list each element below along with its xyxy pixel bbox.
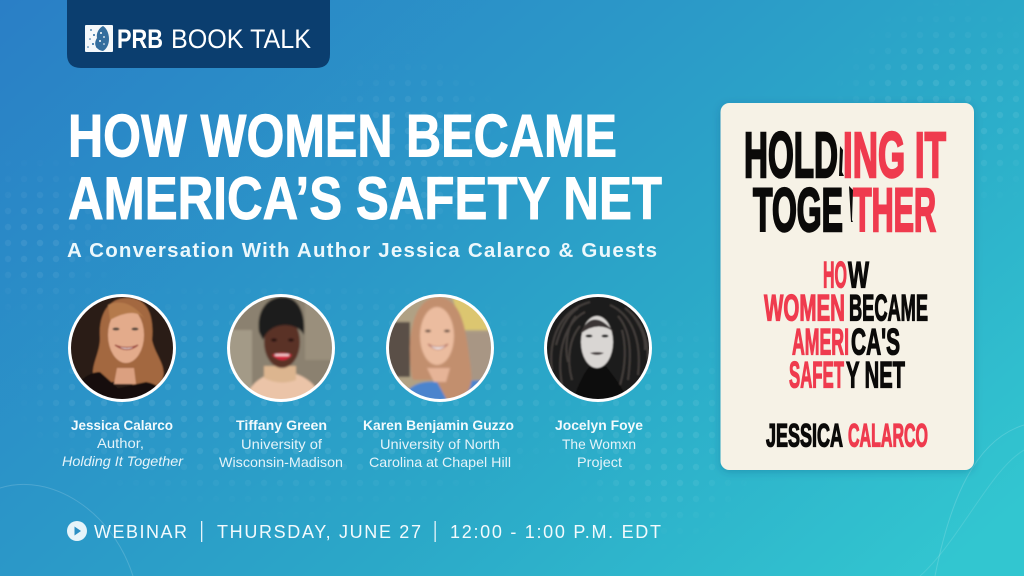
book title: TOGE [753,176,843,244]
photo: Karen Benjamin Guzzo [386,294,494,402]
heading: book talk: BOOK TALK [171,24,311,54]
speaker: Karen Benjamin Guzzo [363,294,514,470]
affiliation [562,436,636,470]
book cover: Holding It Together [720,103,974,470]
role: Author, [97,435,144,451]
affiliation: The Womxn [562,436,636,452]
book subtitle: SAFET [789,354,844,396]
icon: play button [67,521,87,541]
title [68,102,662,232]
book subtitle [764,254,928,396]
speaker: Tiffany Green [219,294,343,470]
book author: JESSICA [766,418,843,454]
book title: HOLD [744,119,838,191]
header tab: PRB Book Talk [67,0,330,68]
photo: Jessica Calarco [68,294,176,402]
book title: THER [853,176,936,244]
affiliation [219,436,343,470]
book cover: Holding It Together: BECAME [849,288,928,328]
name: Tiffany Green [236,417,327,433]
book subtitle: CA'S [851,322,900,362]
affiliation: Project [577,454,622,470]
affiliation: University of [241,436,322,452]
book title: Holding It Together [62,453,184,469]
icon: PRB logo [85,25,113,52]
affiliation: Carolina at Chapel Hill [369,454,511,470]
book subtitle: WOMEN [764,288,845,328]
book subtitle: AMERI [792,322,849,362]
book author: CALARCO [848,418,928,454]
name: Karen Benjamin Guzzo [363,417,514,433]
name: Jessica Calarco [71,417,173,433]
logo wordmark: PRB [117,24,163,54]
subtitle: A Conversation With Author Jessica Calarco & Guests [67,239,657,262]
speaker: Jessica Calarco [62,294,184,469]
event details bar [67,521,661,542]
book subtitle: HO [823,254,847,296]
name: Jocelyn Foye [555,417,643,433]
webinar label: WEBINAR [94,522,187,542]
affiliation [369,436,511,470]
book subtitle: Y NET [846,354,905,396]
book title [744,119,946,244]
title: HOW WOMEN BECAME [68,102,617,170]
time: 12:00 - 1:00 P.M. EDT [450,522,661,542]
book subtitle: W [848,254,869,296]
photo: Tiffany Green [227,294,335,402]
speaker: Jocelyn Foye [544,294,652,470]
date: THURSDAY, JUNE 27 [217,522,421,542]
title: AMERICA’S SAFETY NET [68,164,662,232]
affiliation: University of North [380,436,500,452]
affiliation: Wisconsin-Madison [219,454,343,470]
photo: Jocelyn Foye [544,294,652,402]
